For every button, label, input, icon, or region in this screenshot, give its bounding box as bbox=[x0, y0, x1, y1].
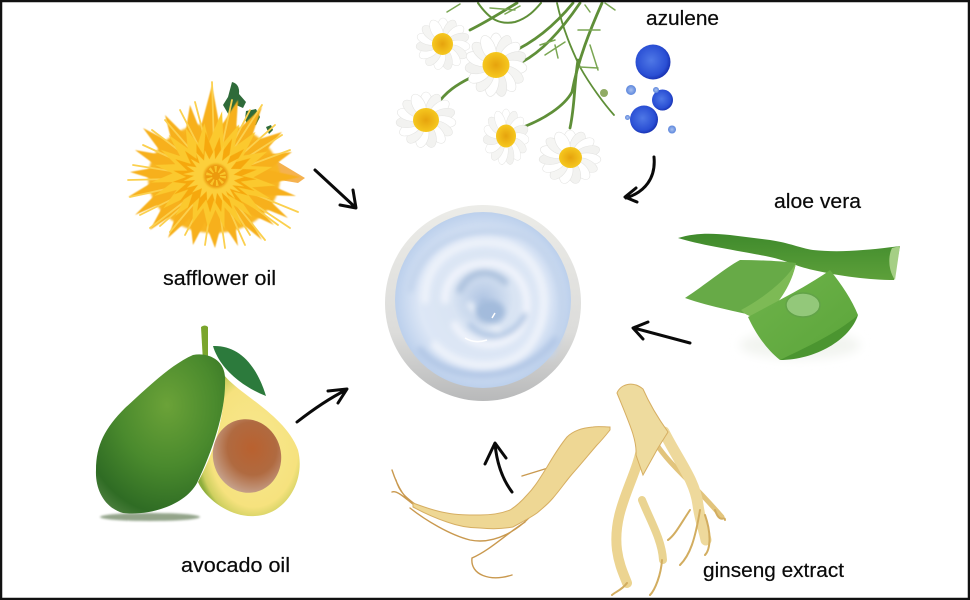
label: avocado oil: avocado oil bbox=[181, 555, 290, 577]
cream jar bbox=[385, 205, 581, 401]
arrow: avocado to cream bbox=[297, 389, 347, 422]
avocado half bbox=[198, 375, 300, 516]
arrow: azulene to cream bbox=[625, 157, 654, 202]
chamomile flowers bbox=[396, 3, 615, 185]
avocado bbox=[96, 326, 300, 521]
orange stem stub bbox=[268, 160, 305, 183]
daisy 4 bbox=[483, 109, 529, 166]
inner yellow spikes bbox=[146, 103, 285, 236]
cut aloe piece right bbox=[748, 270, 858, 360]
right ginseng root bbox=[612, 384, 725, 595]
azulene blue droplets bbox=[625, 44, 676, 134]
arrow: safflower to cream bbox=[315, 170, 356, 208]
outer orange spikes bbox=[128, 85, 300, 248]
long aloe leaf bbox=[678, 234, 900, 280]
safflower flower bbox=[128, 82, 305, 248]
water drop on aloe bbox=[786, 293, 820, 317]
daisy 5 bbox=[538, 130, 602, 185]
arrow: ginseng to cream bbox=[485, 443, 512, 492]
flower body base bbox=[148, 123, 280, 233]
green leaves behind flower bbox=[223, 82, 273, 134]
fine outer bristles bbox=[128, 82, 298, 248]
aloe vera bbox=[678, 234, 900, 360]
avocado pit bbox=[205, 411, 289, 501]
stem bbox=[201, 326, 208, 362]
cut aloe piece left bbox=[685, 260, 796, 318]
stems bbox=[437, 3, 615, 130]
daisy 3 bbox=[396, 92, 456, 149]
arrow: aloe to cream bbox=[633, 322, 690, 343]
label: ginseng extract: ginseng extract bbox=[703, 560, 844, 582]
flower centre bbox=[204, 164, 228, 188]
left ginseng root bbox=[392, 427, 610, 578]
whole avocado bbox=[96, 354, 225, 513]
ginseng roots bbox=[392, 384, 725, 595]
daisy 1 bbox=[416, 18, 470, 71]
label: azulene: azulene bbox=[646, 8, 719, 30]
daisy 2 bbox=[464, 33, 528, 98]
label: safflower oil: safflower oil bbox=[163, 268, 276, 290]
label: aloe vera: aloe vera bbox=[774, 191, 862, 213]
avocado leaf bbox=[213, 346, 266, 396]
